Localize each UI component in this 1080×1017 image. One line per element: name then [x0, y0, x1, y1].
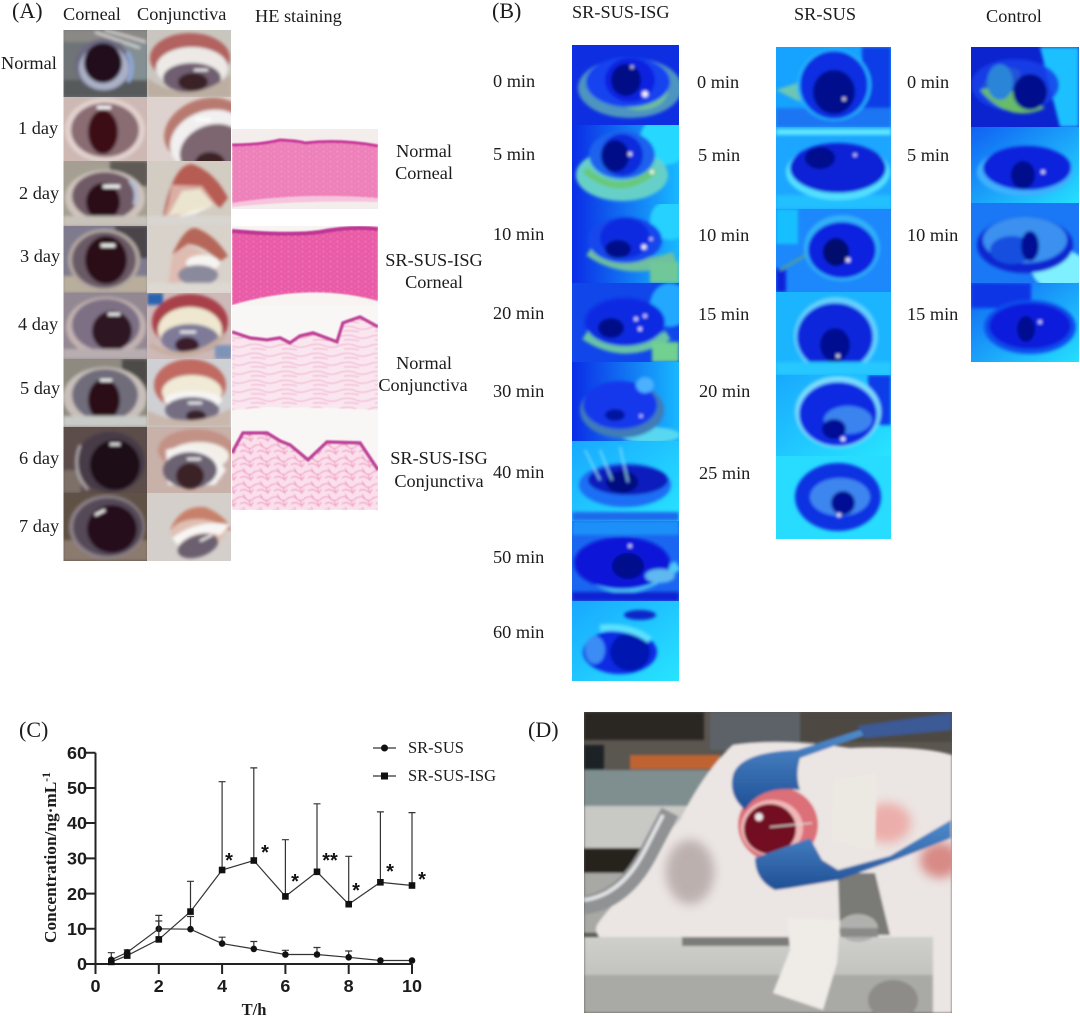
row labels for days — [1, 53, 61, 536]
y axis title: Concentration/ng·mL — [41, 782, 60, 943]
time labels for SR-SUS-ISG — [493, 71, 544, 642]
photo: conjunctiva 7 day — [147, 493, 231, 561]
row labels for days: 4 day — [18, 314, 59, 334]
significance asterisks: ** — [322, 850, 338, 872]
photo: conjunctiva 2 day — [147, 161, 231, 226]
y axis tick labels: 20 — [67, 884, 87, 904]
panel B: fluorescein retention photographs — [492, 0, 1080, 681]
time labels for SR-SUS: 15 min — [698, 304, 749, 324]
column heading: corneal: Corneal — [63, 4, 121, 24]
panel C: concentration-time line chart — [19, 717, 496, 1017]
photo: corneal 5 day — [64, 359, 147, 427]
HE caption: normal conjunctiva: Normal — [396, 353, 452, 373]
significance asterisks: * — [386, 861, 394, 883]
row labels for days: 5 day — [20, 378, 61, 398]
y axis tick labels: 10 — [67, 919, 87, 939]
photo: corneal 3 day — [64, 226, 147, 293]
rabbit head — [596, 742, 952, 1013]
x axis tick labels: 8 — [344, 976, 354, 996]
time labels for SR-SUS-ISG: 60 min — [493, 622, 544, 642]
HE staining: SR-SUS-ISG corneal — [232, 226, 378, 305]
tape on clamp — [773, 918, 840, 1010]
photo: SR-SUS 20 min — [776, 375, 891, 456]
row labels for days: 2 day — [19, 183, 60, 203]
photo: SR-SUS-ISG 30 min — [572, 362, 679, 441]
row labels for days: Normal — [1, 53, 57, 73]
x axis tick labels: 10 — [402, 976, 422, 996]
y axis tick labels: 30 — [67, 848, 87, 868]
significance asterisks: * — [418, 869, 426, 891]
significance asterisks — [225, 842, 426, 902]
HE caption: SR-SUS-ISG conjunctiva — [390, 448, 488, 491]
photo: corneal 6 day — [64, 427, 147, 493]
photo: Control 15 min — [971, 283, 1079, 362]
column heading: conjunctiva: Conjunctiva — [137, 4, 226, 24]
photo: conjunctiva 3 day — [147, 226, 231, 293]
time labels for SR-SUS-ISG: 30 min — [493, 381, 544, 401]
time labels for SR-SUS-ISG: 10 min — [493, 224, 544, 244]
legend: SR-SUS-ISG — [408, 766, 496, 785]
photo: conjunctiva 4 day — [147, 293, 231, 359]
HE staining: normal corneal — [232, 129, 378, 209]
time labels for SR-SUS-ISG: 5 min — [493, 144, 535, 164]
series: SR-SUS-ISG with error bars — [108, 768, 416, 965]
row labels for days: 7 day — [19, 516, 60, 536]
panel A: clinical eye photographs and HE staining — [1, 0, 488, 563]
y axis tick labels — [67, 743, 87, 974]
significance asterisks: * — [225, 850, 233, 872]
photo: SR-SUS-ISG 10 min — [572, 204, 679, 283]
photo: conjunctiva 1 day — [147, 97, 231, 161]
photo: SR-SUS-ISG 50 min — [572, 521, 679, 601]
significance asterisks: * — [291, 871, 299, 893]
column heading: Control: Control — [986, 6, 1042, 26]
HE caption: SR-SUS-ISG corneal: Corneal — [405, 272, 463, 292]
photo: Control 5 min — [971, 127, 1079, 203]
time labels for SR-SUS-ISG: 50 min — [493, 547, 544, 567]
column heading: HE staining: HE staining — [255, 6, 342, 26]
photo: conjunctiva normal — [147, 30, 231, 97]
photo: SR-SUS-ISG 5 min — [572, 125, 679, 204]
photo: SR-SUS 25 min — [776, 456, 891, 539]
HE caption: normal conjunctiva — [378, 353, 468, 395]
photo: SR-SUS 0 min — [776, 47, 891, 127]
x axis tick labels: 6 — [280, 976, 291, 996]
panel label D: (D) — [528, 717, 559, 742]
metal bar — [584, 937, 933, 1013]
time labels for Control: 5 min — [907, 145, 949, 165]
row labels for days: 6 day — [19, 448, 60, 468]
HE caption: normal corneal: Normal — [396, 141, 452, 161]
y axis title: -1 — [41, 772, 53, 782]
photo: Control 0 min — [971, 47, 1079, 127]
HE caption: SR-SUS-ISG conjunctiva: SR-SUS-ISG — [390, 448, 488, 468]
clamp and nut — [682, 937, 790, 946]
time labels for Control: 15 min — [907, 304, 958, 324]
HE staining: SR-SUS-ISG conjunctiva — [232, 412, 378, 510]
legend: SR-SUS — [408, 738, 464, 757]
series: SR-SUS with error bars — [108, 915, 415, 964]
photo: corneal 7 day — [64, 493, 147, 561]
y axis tick labels: 60 — [67, 743, 87, 763]
x axis tick labels — [90, 976, 422, 996]
significance asterisks: * — [352, 880, 360, 902]
x axis tick labels: 0 — [90, 976, 101, 996]
HE caption: SR-SUS-ISG conjunctiva: Conjunctiva — [394, 471, 484, 491]
photo: corneal 4 day — [64, 293, 147, 359]
metal rod — [584, 812, 670, 905]
photo: corneal normal — [64, 30, 147, 97]
photo: corneal 1 day — [64, 97, 147, 161]
time labels for Control: 0 min — [907, 72, 949, 92]
x axis tick labels: 4 — [217, 976, 227, 996]
row labels for days: 1 day — [18, 118, 59, 138]
photo: SR-SUS-ISG 40 min — [572, 441, 679, 521]
HE caption: SR-SUS-ISG corneal: SR-SUS-ISG — [385, 250, 483, 270]
time labels for SR-SUS: 10 min — [698, 225, 749, 245]
photo: SR-SUS-ISG 60 min — [572, 601, 679, 681]
time labels for Control: 10 min — [907, 225, 958, 245]
time labels for SR-SUS-ISG: 0 min — [493, 71, 535, 91]
photo: SR-SUS-ISG 0 min — [572, 45, 679, 125]
time labels for SR-SUS: 0 min — [697, 72, 739, 92]
speculum lower blade and arm — [755, 820, 951, 890]
photo: SR-SUS 5 min — [776, 127, 891, 209]
HE caption: normal conjunctiva: Conjunctiva — [378, 375, 468, 395]
axes with ticks — [86, 753, 412, 974]
panel label C: (C) — [19, 717, 48, 742]
photo: corneal 2 day — [64, 161, 147, 226]
time labels for SR-SUS — [697, 72, 750, 483]
time labels for SR-SUS-ISG: 40 min — [493, 462, 544, 482]
photo: SR-SUS-ISG 20 min — [572, 283, 679, 362]
time labels for SR-SUS: 5 min — [698, 145, 740, 165]
photo: SR-SUS 10 min — [776, 209, 891, 292]
time labels for Control — [907, 72, 958, 324]
significance asterisks: * — [261, 842, 269, 864]
y axis tick labels: 40 — [67, 813, 87, 833]
time labels for SR-SUS: 20 min — [699, 381, 750, 401]
HE caption: normal corneal — [395, 141, 453, 183]
time labels for SR-SUS-ISG: 20 min — [493, 303, 544, 323]
x axis tick labels: 2 — [154, 976, 164, 996]
row labels for days: 3 day — [20, 246, 61, 266]
y axis tick labels: 0 — [77, 954, 87, 974]
y axis tick labels: 50 — [67, 778, 87, 798]
photo: conjunctiva 5 day — [147, 359, 231, 427]
panel D: photograph of rabbit in restraint with ocular needle — [584, 712, 952, 1013]
time labels for SR-SUS: 25 min — [699, 463, 750, 483]
eye — [738, 787, 818, 863]
column heading: SR-SUS: SR-SUS — [794, 4, 856, 24]
speculum upper blade and arm — [732, 730, 865, 810]
HE caption: normal corneal: Corneal — [395, 163, 453, 183]
tape on forehead — [832, 773, 877, 852]
legend — [373, 738, 496, 785]
HE caption: SR-SUS-ISG corneal — [385, 250, 483, 292]
photo: conjunctiva 6 day — [147, 427, 231, 493]
column heading: SR-SUS-ISG: SR-SUS-ISG — [572, 2, 670, 22]
screw — [868, 980, 918, 1017]
HE staining: normal conjunctiva — [232, 305, 378, 412]
photo: SR-SUS 15 min — [776, 292, 891, 375]
dark clamp plate — [838, 873, 890, 935]
photo: Control 10 min — [971, 203, 1079, 283]
